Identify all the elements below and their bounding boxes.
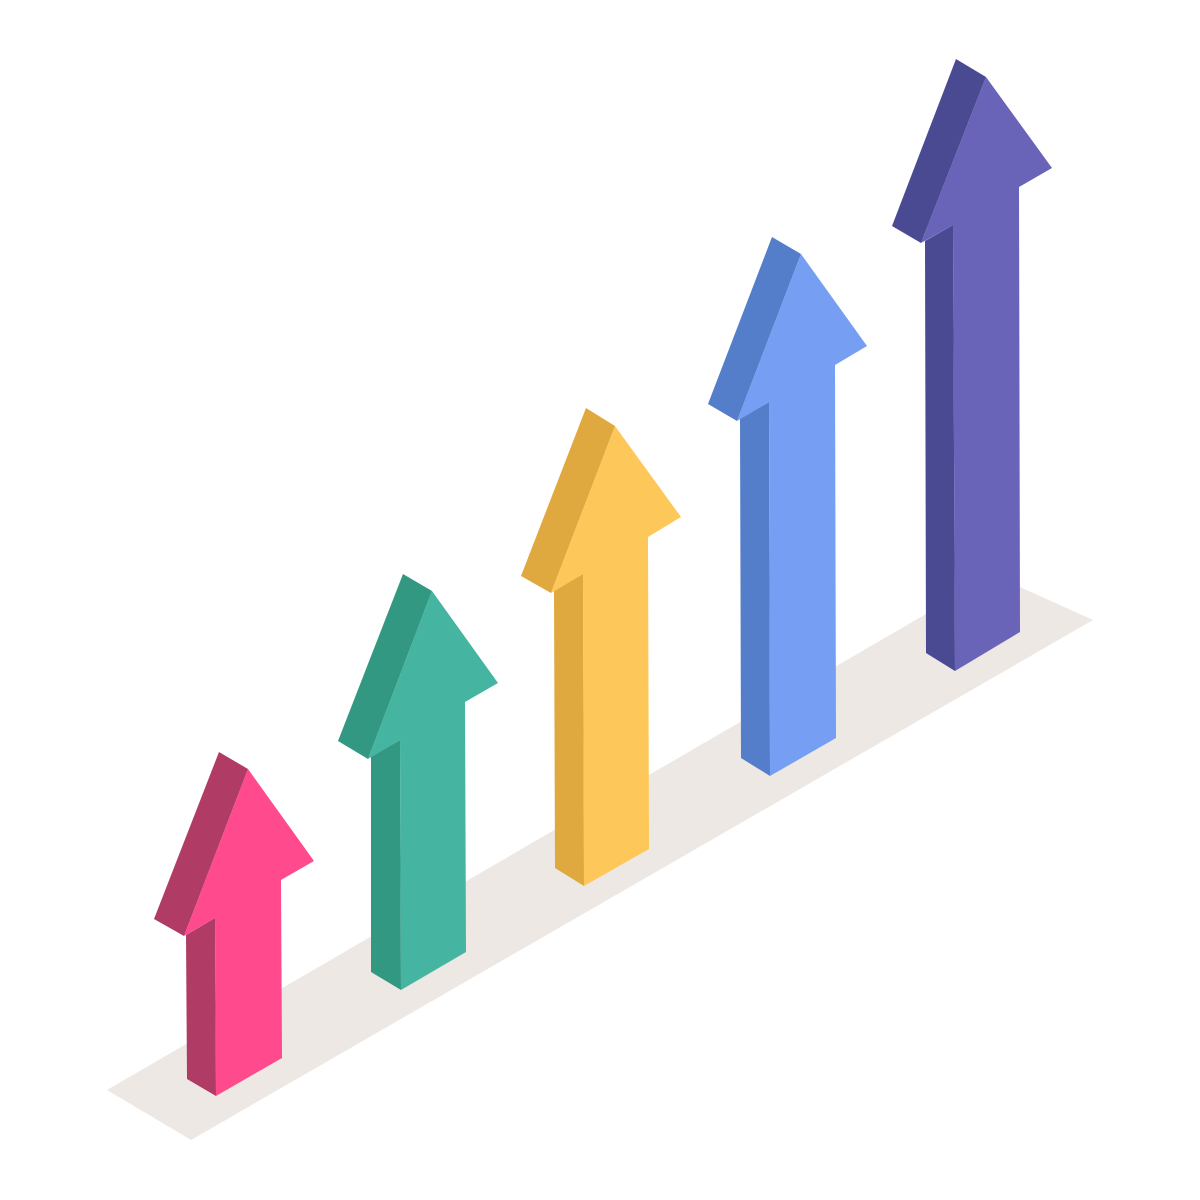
arrow 4: blue: [708, 237, 867, 776]
floor platform: [107, 575, 1093, 1140]
arrow 1: pink: [154, 752, 314, 1096]
arrow 2: teal: [338, 574, 498, 990]
arrow 5: purple: [892, 59, 1052, 671]
arrow 3: yellow: [521, 408, 681, 886]
